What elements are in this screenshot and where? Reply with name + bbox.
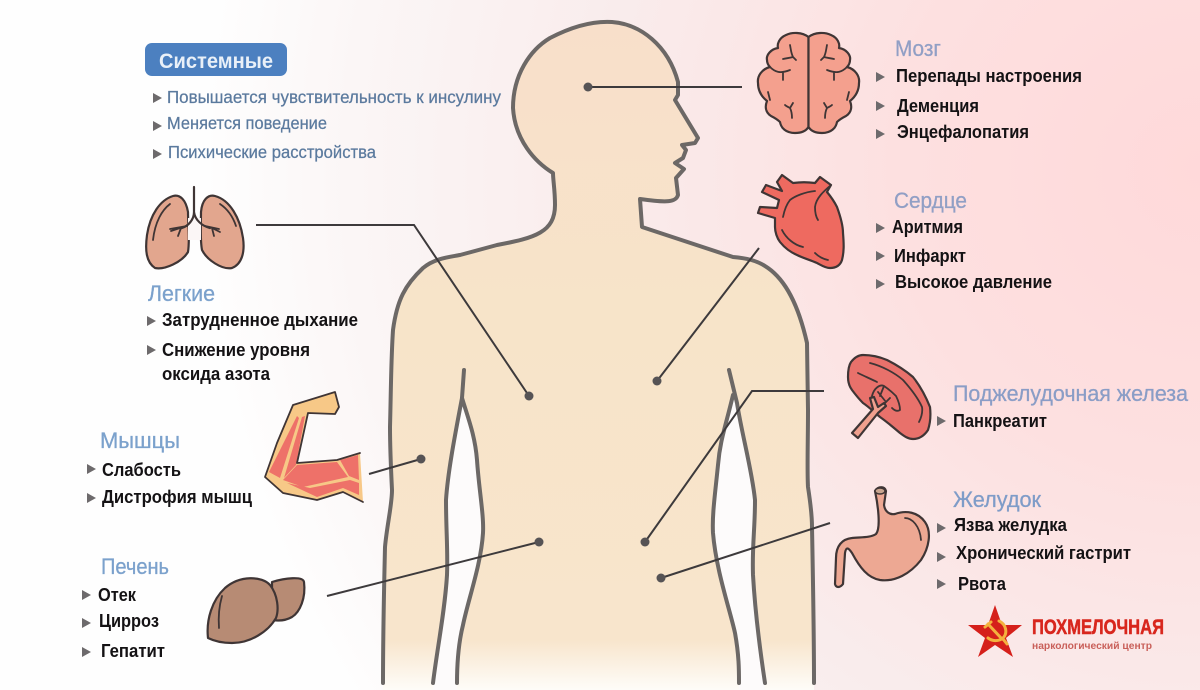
- heading: brain: Мозг: [895, 36, 941, 61]
- list: heart: Высокое давление: [895, 272, 1052, 292]
- list: muscles: [87, 460, 252, 507]
- list: brain: Энцефалопатия: [897, 122, 1029, 142]
- logo: [968, 605, 1164, 657]
- list: stomach: Хронический гастрит: [956, 543, 1131, 563]
- connector: brain: [584, 82, 742, 92]
- human body silhouette: [383, 22, 814, 690]
- panel: brain: [758, 33, 1082, 142]
- panel: lungs: [146, 187, 358, 384]
- heading pill: systemic: Системные: [159, 49, 273, 73]
- list: systemic effects: Повышается чувствительность к инсулину: [167, 87, 501, 107]
- list: heart: [876, 217, 1052, 292]
- heading: lungs: Легкие: [148, 281, 215, 306]
- body outline: [383, 22, 814, 683]
- list: stomach: [937, 515, 1131, 594]
- icon: red star with hammer and sickle: [968, 605, 1022, 657]
- icon: pancreas: [848, 355, 930, 439]
- list: muscles: Дистрофия мышц: [102, 487, 252, 507]
- list: stomach: Язва желудка: [954, 515, 1068, 535]
- icon: brain: [758, 33, 859, 133]
- list: heart: Аритмия: [892, 217, 963, 237]
- connector: lungs: [256, 225, 534, 400]
- heading pill: systemic: [145, 43, 287, 76]
- list: lungs: Снижение уровня: [162, 340, 310, 360]
- heading: heart: Сердце: [894, 188, 967, 213]
- connector: stomach: [656, 523, 830, 582]
- list: liver: Отек: [98, 585, 137, 605]
- panel: heart: [758, 175, 1052, 292]
- list: lungs: [147, 310, 358, 384]
- connector: liver: [327, 538, 544, 596]
- logo subtitle: наркологический центр: [1032, 641, 1152, 652]
- list: heart: Инфаркт: [894, 246, 966, 266]
- connector: heart: [652, 248, 759, 386]
- panel: liver: [82, 554, 304, 661]
- list: muscles: Слабость: [102, 460, 181, 480]
- heading: pancreas: Поджелудочная железа: [953, 381, 1188, 406]
- panel: systemic: [145, 43, 501, 162]
- heading: liver: Печень: [101, 554, 169, 579]
- icon: stomach: [835, 487, 929, 587]
- list: lungs: Затрудненное дыхание: [162, 310, 358, 330]
- list: liver: Цирроз: [99, 611, 159, 631]
- list: lungs: оксида азота: [162, 364, 271, 384]
- panel: stomach: [835, 487, 1131, 594]
- icon: heart: [758, 175, 844, 268]
- panel: muscles: [87, 392, 363, 507]
- logo name: ПОХМЕЛОЧНАЯ: [1032, 616, 1164, 639]
- list: systemic effects: [153, 87, 501, 162]
- list: systemic effects: Психические расстройства: [168, 142, 376, 162]
- list: stomach: Рвота: [958, 574, 1007, 594]
- connector: muscles: [369, 454, 426, 474]
- list: liver: [82, 585, 165, 661]
- icon: lungs: [146, 187, 244, 268]
- heading: muscles: Мышцы: [100, 428, 180, 453]
- list: pancreas: Панкреатит: [953, 411, 1047, 431]
- panel: pancreas: [848, 355, 1188, 439]
- icon: flexed arm: [265, 392, 363, 502]
- list: brain: Перепады настроения: [896, 66, 1082, 86]
- list: brain: [876, 66, 1082, 142]
- list: liver: Гепатит: [101, 641, 165, 661]
- icon: liver: [208, 578, 304, 643]
- connector: pancreas: [640, 391, 824, 546]
- heading: stomach: Желудок: [953, 487, 1041, 512]
- list: systemic effects: Меняется поведение: [167, 113, 327, 133]
- list: brain: Деменция: [897, 96, 979, 116]
